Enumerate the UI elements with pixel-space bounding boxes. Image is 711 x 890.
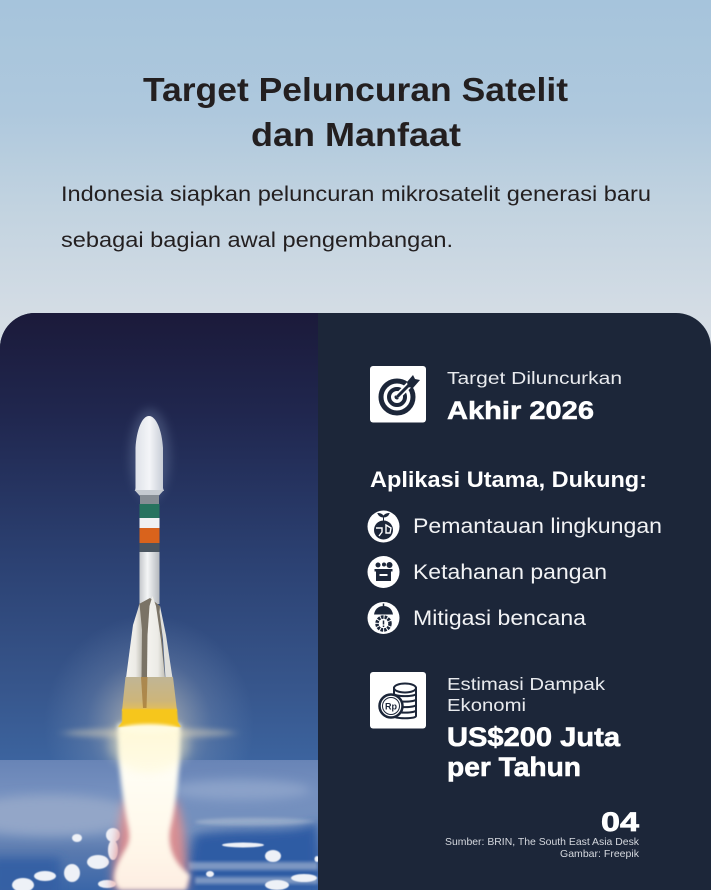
title bbox=[143, 71, 568, 153]
intro text bbox=[61, 182, 651, 252]
clouds bbox=[0, 760, 320, 890]
icon: globe sprout bbox=[368, 510, 400, 542]
value: US$200 Juta bbox=[447, 722, 620, 752]
rocket bbox=[118, 416, 181, 734]
text: Mitigasi bencana bbox=[413, 606, 586, 630]
label: Target Diluncurkan bbox=[447, 368, 622, 388]
label: Ekonomi bbox=[447, 695, 526, 715]
label: Estimasi Dampak bbox=[447, 674, 605, 694]
gap between boosters bbox=[138, 598, 165, 677]
value: per Tahun bbox=[447, 752, 581, 782]
text: Pemantauan lingkungan bbox=[413, 514, 662, 538]
page number: 04 bbox=[601, 807, 639, 837]
intro text: sebagai bagian awal pengembangan. bbox=[61, 228, 453, 252]
rocket glow bbox=[62, 407, 237, 760]
lower booster section bbox=[122, 677, 177, 711]
title: dan Manfaat bbox=[251, 116, 461, 153]
target date block bbox=[370, 366, 622, 425]
yellow collar bbox=[118, 709, 181, 727]
left booster bbox=[126, 604, 142, 678]
flame bbox=[64, 717, 234, 890]
panel: rocket launch image bbox=[0, 313, 320, 890]
intro text: Indonesia siapkan peluncuran mikrosatelit generasi baru bbox=[61, 182, 651, 206]
title: Target Peluncuran Satelit bbox=[143, 71, 568, 108]
value: Akhir 2026 bbox=[447, 397, 594, 425]
fairing bbox=[135, 416, 164, 491]
label bbox=[447, 674, 605, 715]
economic impact block bbox=[370, 672, 620, 782]
text: Ketahanan pangan bbox=[413, 560, 607, 584]
value bbox=[447, 722, 620, 782]
sky background bbox=[0, 0, 711, 320]
source credit: Sumber: BRIN, The South East Asia Desk bbox=[445, 836, 640, 848]
icon: coins bbox=[370, 672, 426, 728]
source credit: Gambar: Freepik bbox=[560, 848, 640, 860]
interstage bbox=[140, 495, 159, 505]
list: food security bbox=[368, 556, 607, 588]
Rp symbol: Rp bbox=[385, 702, 397, 712]
source credit bbox=[445, 836, 640, 860]
icon: umbrella and gear bbox=[368, 602, 400, 634]
center booster bbox=[147, 596, 165, 678]
icon: food box bbox=[368, 556, 400, 588]
list: environmental monitoring bbox=[368, 510, 662, 542]
right booster bbox=[160, 606, 172, 678]
main applications heading: Aplikasi Utama, Dukung: bbox=[370, 467, 647, 492]
icon: target bbox=[370, 366, 426, 422]
panel: dark information panel bbox=[0, 313, 711, 890]
list: disaster mitigation bbox=[368, 602, 586, 634]
